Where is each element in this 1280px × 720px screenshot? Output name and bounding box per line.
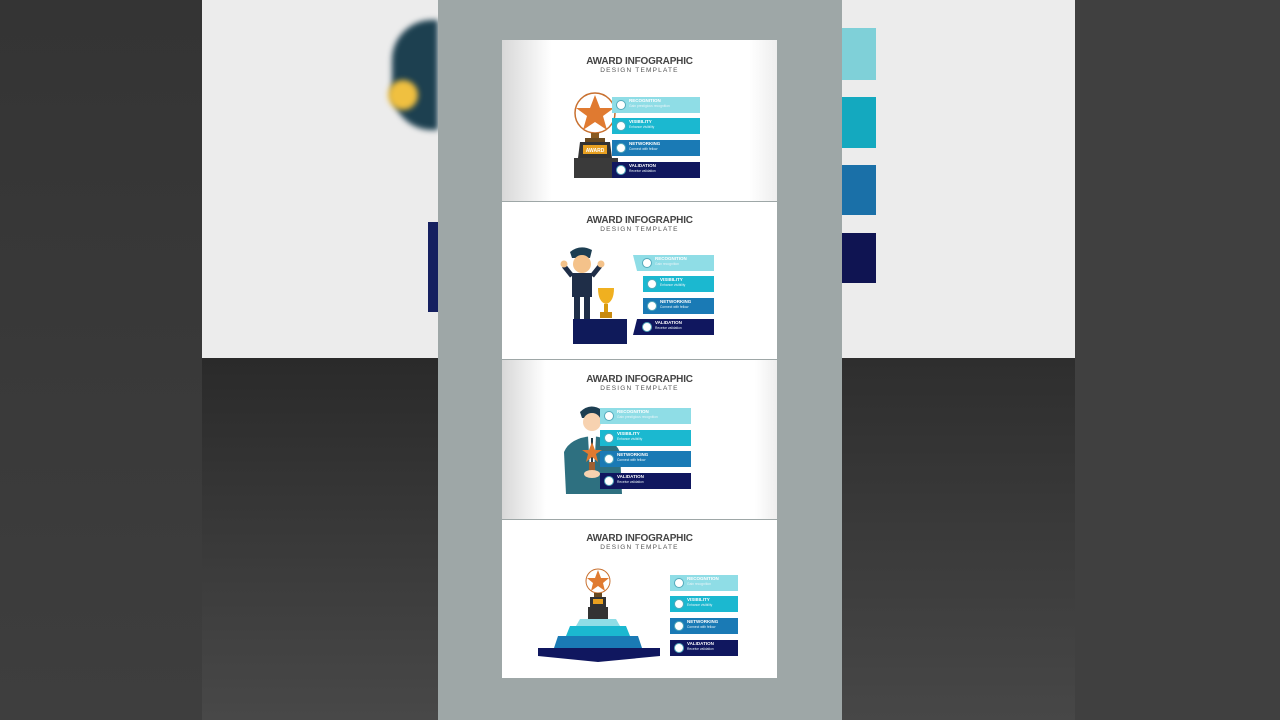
panel 3: man holding award: DESIGN TEMPLATE xyxy=(600,385,679,392)
panel 3: man holding award: VISIBILITY xyxy=(617,431,640,436)
illustration: pyramid podium xyxy=(538,568,660,662)
panel 4: trophy on pyramid: NETWORKING xyxy=(687,619,718,624)
center column xyxy=(438,0,842,720)
panel 2: cheering man: Enhance visibility xyxy=(660,283,685,287)
blurred right slide xyxy=(842,0,1075,358)
bars xyxy=(600,408,691,424)
panel 3: man holding award: Connect with fellow xyxy=(617,458,645,462)
blurred lower left xyxy=(202,358,438,720)
title: AWARD INFOGRAPHIC xyxy=(586,215,693,226)
background left dark xyxy=(0,0,202,720)
panel 2: cheering man: DESIGN TEMPLATE xyxy=(600,226,679,233)
panel 3: man holding award: NETWORKING xyxy=(617,452,648,457)
bars xyxy=(612,97,700,113)
panel 1: trophy with star: VISIBILITY xyxy=(629,119,652,124)
panel 1: trophy with star: Enhance visibility xyxy=(629,125,654,129)
bars xyxy=(670,575,738,591)
bars: Gain recognition xyxy=(655,262,679,266)
bars: RECOGNITION xyxy=(629,98,661,103)
panel 4: trophy on pyramid xyxy=(502,520,777,678)
panel 2: cheering man: NETWORKING xyxy=(660,299,691,304)
illustration: man and trophy xyxy=(560,247,627,344)
bars: Gain recognition xyxy=(687,582,711,586)
panel 1: trophy with star: VALIDATION xyxy=(629,163,656,168)
bars: RECOGNITION xyxy=(655,256,687,261)
panel 4: trophy on pyramid: Receive validation xyxy=(687,647,714,651)
illustration: man with star award xyxy=(564,406,622,494)
bars: RECOGNITION xyxy=(687,576,719,581)
panel 3: man holding award: Receive validation xyxy=(617,480,644,484)
panel 4: trophy on pyramid: VALIDATION xyxy=(687,641,714,646)
panel 1: trophy with star: DESIGN TEMPLATE xyxy=(600,67,679,74)
bars xyxy=(633,255,714,271)
bars: Gain prestigious recognition xyxy=(629,104,670,108)
bars: Gain prestigious recognition xyxy=(617,415,658,419)
title: AWARD INFOGRAPHIC xyxy=(586,374,693,385)
panel 2: cheering man: VISIBILITY xyxy=(660,277,683,282)
title: AWARD INFOGRAPHIC xyxy=(586,56,693,67)
panel 2: cheering man xyxy=(502,202,777,359)
panel 1: trophy with star: NETWORKING xyxy=(629,141,660,146)
panel 4: trophy on pyramid: VISIBILITY xyxy=(687,597,710,602)
icon: star trophy: AWARD xyxy=(586,148,605,154)
panel 2: cheering man: Connect with fellow xyxy=(660,305,688,309)
panel 3: man holding award xyxy=(502,360,777,519)
title: AWARD INFOGRAPHIC xyxy=(586,533,693,544)
panel 1: trophy with star xyxy=(502,40,777,201)
panel 3: man holding award: VALIDATION xyxy=(617,474,644,479)
panel 4: trophy on pyramid: DESIGN TEMPLATE xyxy=(600,544,679,551)
panel 2: cheering man: Receive validation xyxy=(655,326,682,330)
panel 3: man holding award: Enhance visibility xyxy=(617,437,642,441)
panel 1: trophy with star: Connect with fellow xyxy=(629,147,657,151)
bars: RECOGNITION xyxy=(617,409,649,414)
blurred left slide xyxy=(202,0,438,358)
panel 1: trophy with star: Receive validation xyxy=(629,169,656,173)
icon: star trophy xyxy=(574,92,618,178)
panel 4: trophy on pyramid: Enhance visibility xyxy=(687,603,712,607)
panel 4: trophy on pyramid: Connect with fellow xyxy=(687,625,715,629)
panel 2: cheering man: VALIDATION xyxy=(655,320,682,325)
